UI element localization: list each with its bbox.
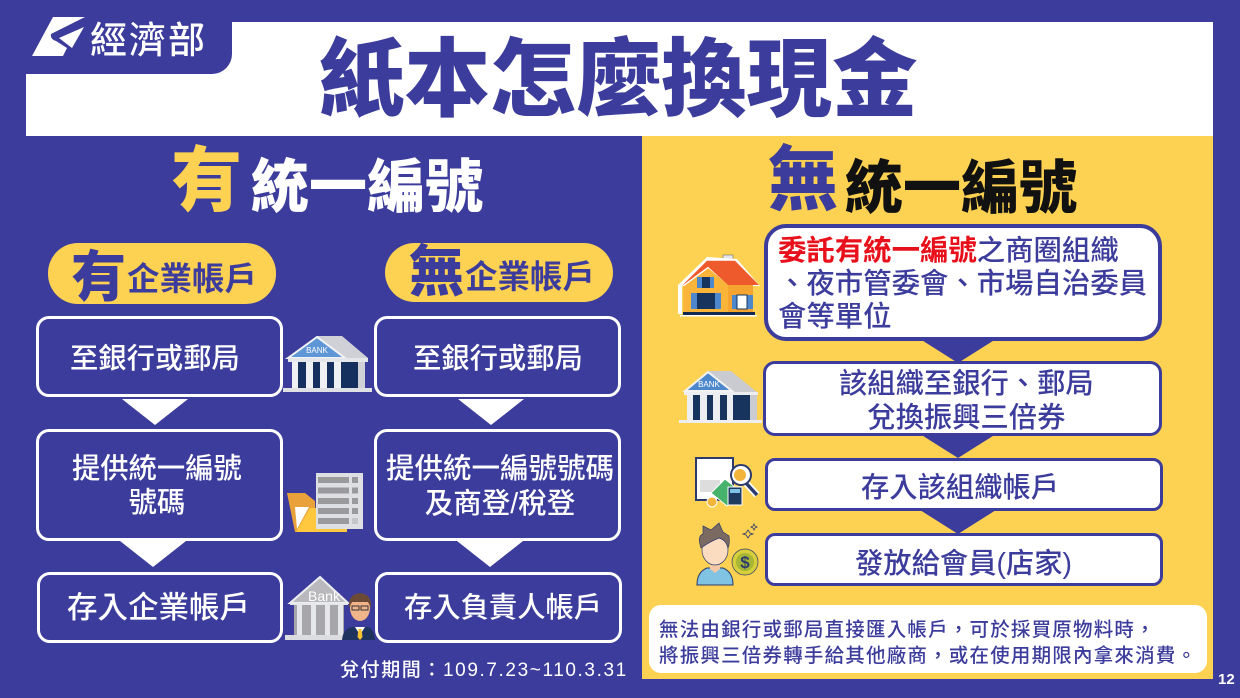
arrow [920, 434, 996, 458]
heading text: 統一編號 [251, 140, 483, 224]
logo mark [32, 17, 85, 56]
step box: go to bank [763, 361, 1162, 436]
note text: 無法由銀行或郵局直接匯入帳戶，可於採買原物料時， [659, 619, 1156, 641]
step box: distribute [765, 533, 1163, 586]
arrow [920, 339, 996, 363]
step box: deposit to owner [375, 572, 622, 643]
step text: 該組織至銀行、郵局 [839, 367, 1094, 399]
icon: house [678, 254, 760, 316]
step box: deposit [765, 458, 1163, 511]
right heading [768, 124, 1077, 225]
icon: bank [679, 370, 762, 423]
icon: bank: BANK [698, 380, 721, 389]
step box: deposit to company [37, 572, 283, 643]
step text: 至銀行或郵局 [413, 342, 583, 374]
step text [839, 367, 1094, 433]
main title: 紙本怎麼換現金 [319, 10, 918, 134]
validity note: 兌付期間：109.7.23~110.3.31 [340, 660, 628, 681]
icon: bank and person [285, 576, 375, 640]
icon: person with money: $ [740, 553, 750, 572]
note text: 將振興三倍券轉手給其他廠商，或在使用期限內拿來消費。 [659, 645, 1197, 667]
step text: 兌換振興三倍券 [867, 401, 1065, 433]
pill emphasis: 無 [409, 227, 464, 307]
right yellow panel [642, 136, 1213, 679]
step text: 委託有統一編號之商圈組織 [778, 235, 1119, 267]
icon: accounting [695, 457, 760, 508]
left section heading [171, 124, 483, 226]
pill emphasis: 有 [71, 232, 126, 312]
right pill: no company account [385, 243, 613, 302]
arrow [120, 541, 186, 567]
step box: entrust organization [764, 224, 1162, 341]
icon: person with money [696, 522, 758, 586]
heading text: 統一編號 [845, 141, 1077, 225]
step box: provide number and registration [374, 429, 621, 541]
logo tab [20, 15, 232, 74]
step text: 號碼 [129, 486, 185, 518]
step box: to bank or post [374, 316, 621, 397]
page number: 12 [1218, 671, 1235, 688]
heading emphasis: 無 [768, 124, 838, 225]
step box: provide number [36, 429, 283, 541]
step text [386, 453, 614, 520]
step text [778, 235, 1147, 333]
step text: 、夜市管委會、市場自治委員 [778, 268, 1147, 300]
arrow [457, 541, 523, 567]
icon: bank and person: Bank [308, 588, 341, 604]
step text: 提供統一編號號碼 [386, 453, 614, 485]
step text: 及商登/稅登 [425, 488, 575, 520]
step box: to bank or post [36, 316, 283, 397]
step text: 存入該組織帳戶 [861, 471, 1059, 503]
heading emphasis: 有 [171, 124, 242, 226]
step text [72, 452, 242, 518]
step text: 存入負責人帳戶 [404, 591, 602, 623]
arrow [920, 510, 996, 534]
note box [649, 605, 1207, 673]
left pill: has company account [48, 243, 276, 304]
title banner [26, 22, 1213, 136]
step text: 提供統一編號 [72, 452, 242, 484]
arrow [122, 399, 188, 425]
step text: 會等單位 [778, 301, 892, 333]
icon: bank [283, 336, 372, 392]
logo text: 經濟部 [90, 10, 207, 64]
icon: bank: BANK [306, 346, 329, 355]
pill text: 企業帳戶 [127, 253, 257, 300]
arrow [458, 399, 524, 425]
icon: folder and document [287, 473, 363, 532]
pill text: 企業帳戶 [465, 251, 595, 298]
step text: 存入企業帳戶 [67, 591, 250, 625]
step text: 發放給會員(店家) [855, 547, 1072, 579]
step text: 至銀行或郵局 [70, 342, 240, 374]
note text [659, 619, 1197, 667]
